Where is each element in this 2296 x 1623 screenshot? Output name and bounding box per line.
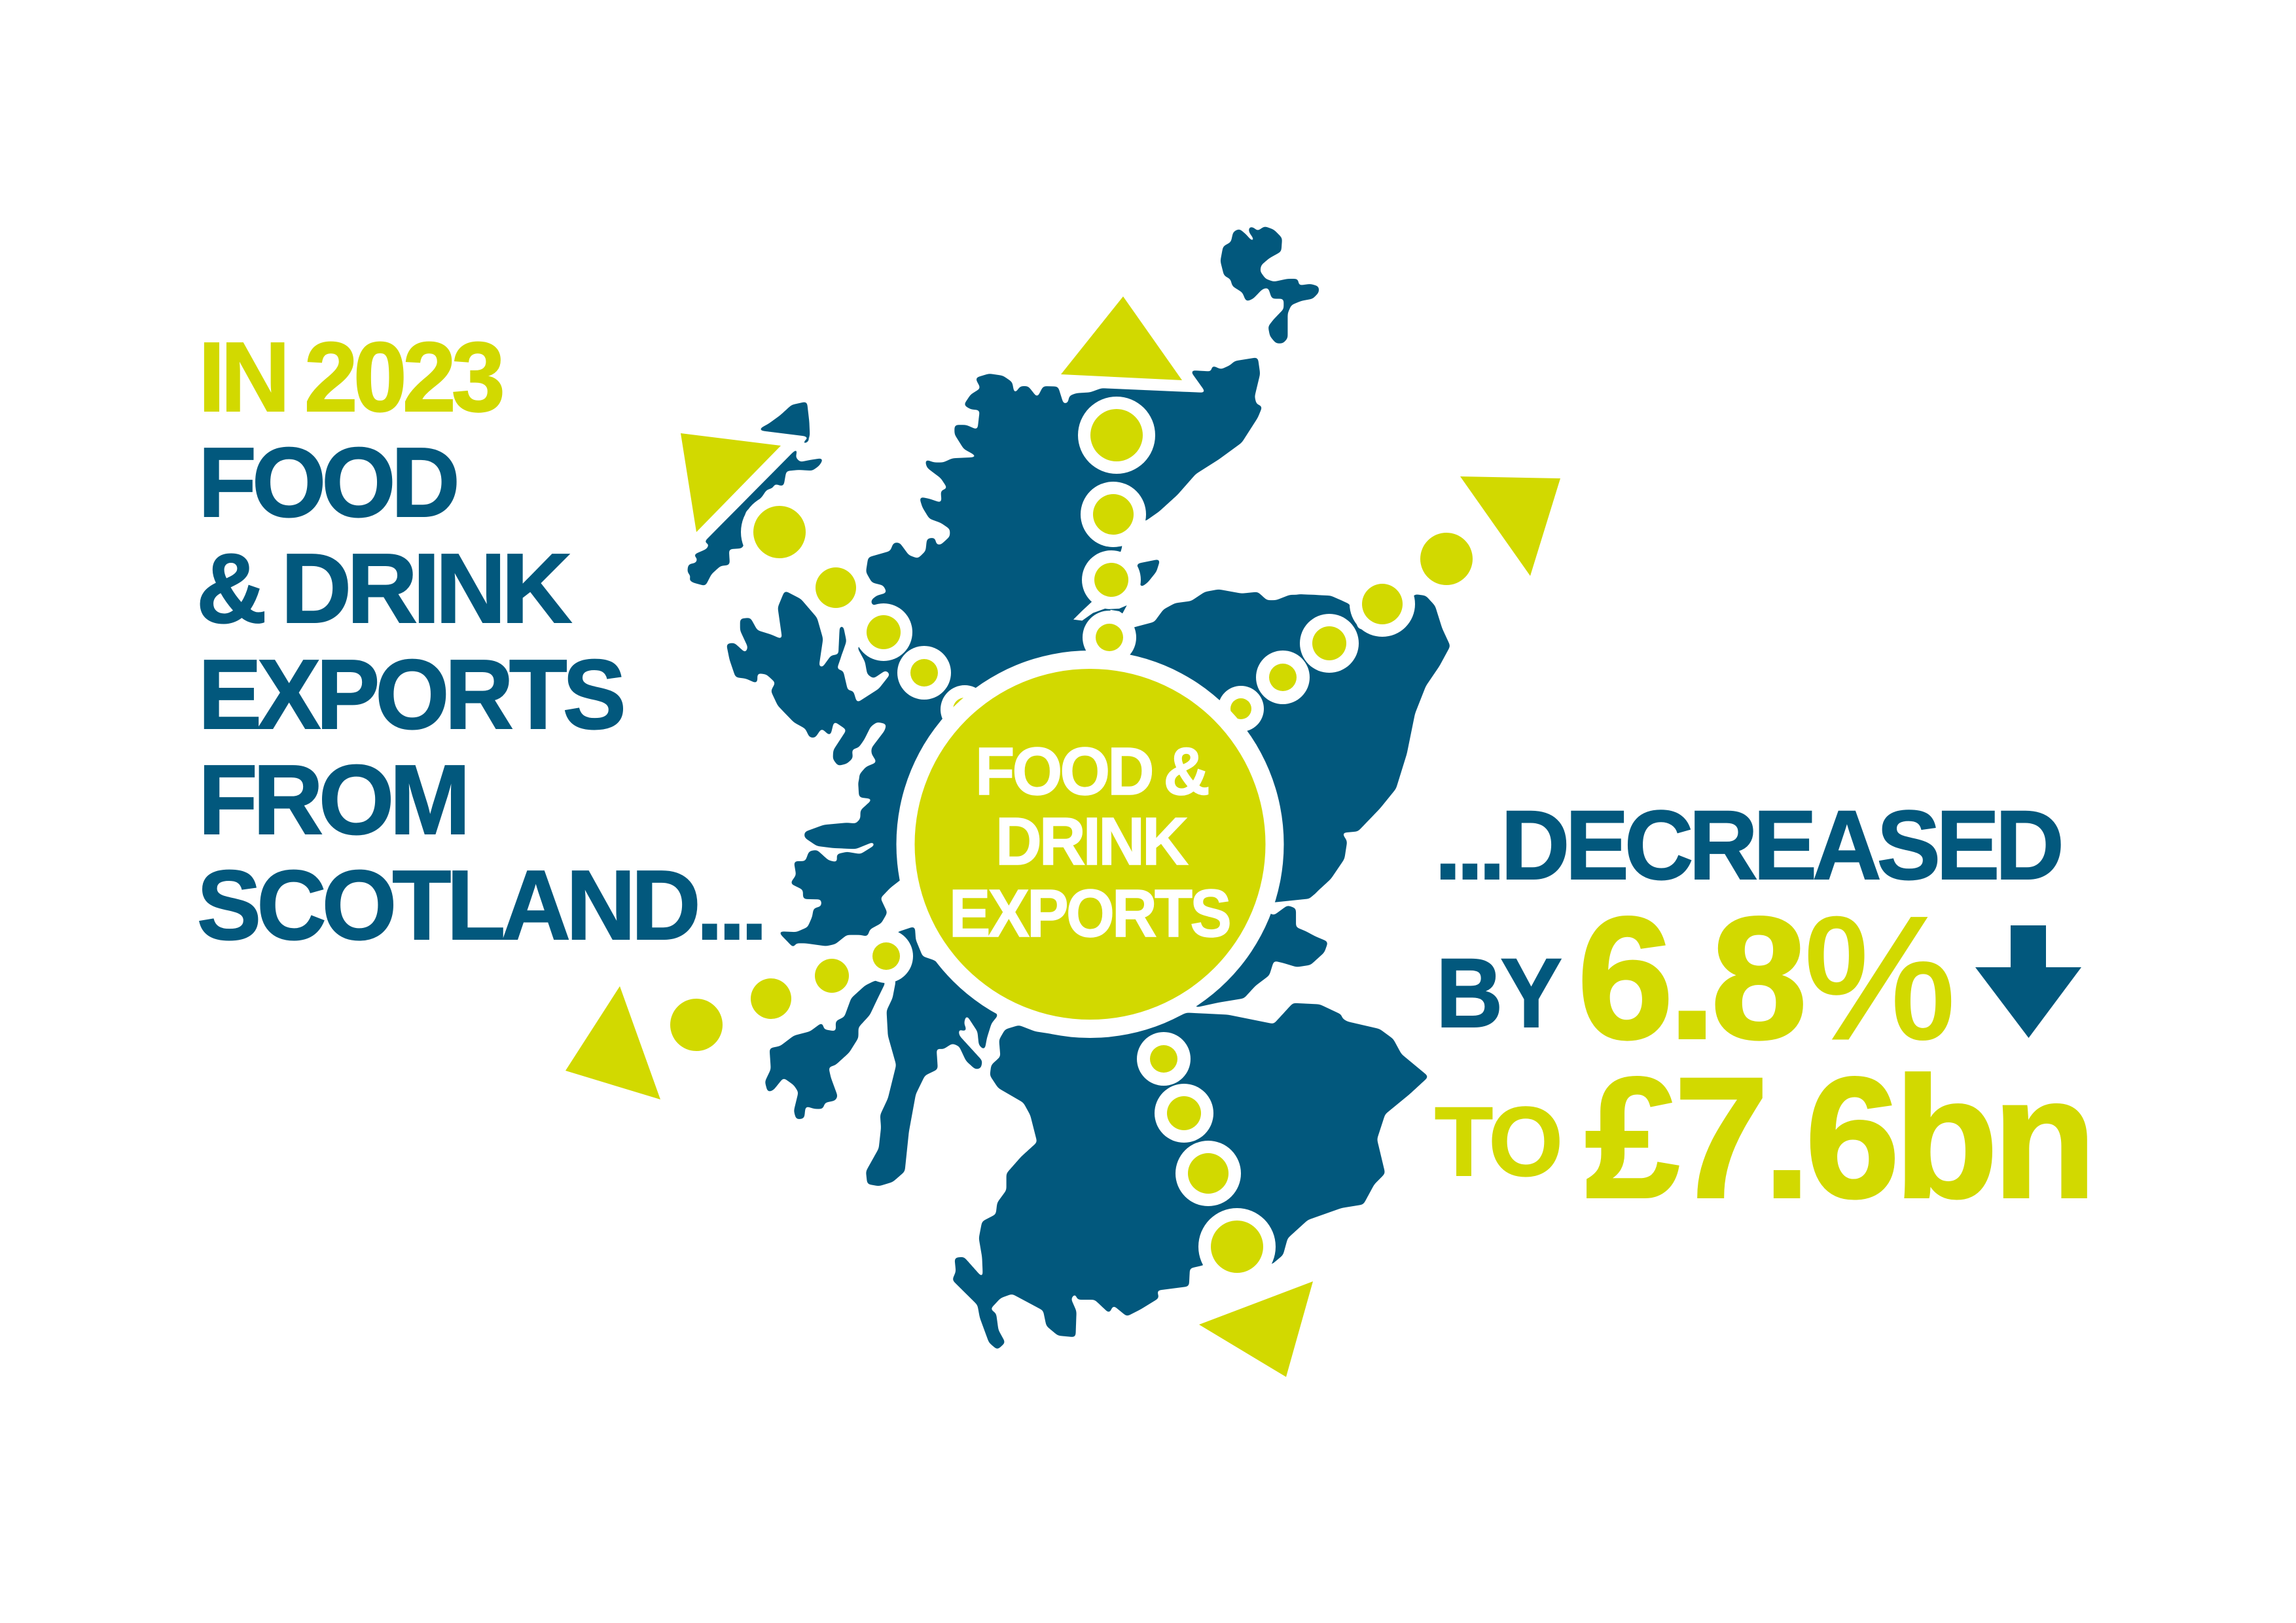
south east ring 3 (1175, 1141, 1241, 1206)
triangle: north east (1460, 476, 1560, 576)
heading text block: FOOD (198, 427, 456, 537)
morvern and mull (778, 781, 943, 948)
left heading (196, 321, 763, 960)
north west dot 1 (741, 493, 818, 571)
north ring 3 (1082, 550, 1141, 609)
land masses (687, 226, 1450, 1349)
map of Scotland (670, 226, 1473, 1349)
north west ring 4 (897, 646, 951, 700)
dot chain: north west (741, 493, 989, 734)
south west dot 4 (670, 999, 723, 1051)
dot chain: south east (1137, 1032, 1276, 1285)
northern island group (1221, 226, 1319, 344)
south east ring 4 (1198, 1208, 1276, 1285)
grampian east coast (1298, 594, 1450, 899)
heading text block: SCOTLAND... (197, 849, 763, 960)
heading year line: IN 2023 (198, 321, 502, 432)
outer hebrides south (687, 438, 824, 586)
east ring 2 (1256, 651, 1310, 704)
north ring 4 (1083, 611, 1136, 664)
outer hebrides north (757, 402, 810, 442)
circle white border (897, 651, 1284, 1038)
north ring 1 (1078, 397, 1155, 474)
figure: 6.8 percent (1577, 882, 1956, 1075)
circle lime fill (915, 669, 1266, 1020)
decreased line: ...DECREASED (1435, 790, 2061, 900)
south east coast (1298, 1004, 1428, 1222)
heading text block (196, 427, 763, 960)
north west ring 3 (855, 603, 912, 661)
triangle: south east (1199, 1281, 1313, 1377)
south west dot 3 (751, 978, 791, 1019)
south west dot 2 (815, 959, 849, 993)
black isle wedge (1137, 559, 1160, 588)
argyll and kintyre (866, 927, 998, 1186)
east ring 4 (1350, 571, 1415, 637)
heading text block: EXPORTS (198, 639, 622, 749)
figure: 6.8 percent: 6.8 (1577, 882, 1803, 1075)
circle label: DRINK (996, 804, 1188, 879)
figure: 7.6 billion pounds: £7.6bn (1585, 1042, 2091, 1234)
by label: BY (1436, 938, 1561, 1048)
circle label: FOOD & (975, 734, 1209, 809)
islay and jura (765, 980, 886, 1119)
north ring 2 (1081, 482, 1146, 547)
triangle: south west (565, 986, 660, 1099)
dot chain: east (1218, 533, 1473, 732)
figure: 6.8 percent: % (1804, 882, 1956, 1075)
fife (1191, 906, 1328, 1007)
central belt (1081, 781, 1342, 902)
icon: down arrow (1975, 925, 2081, 1038)
dot chain: south west (670, 929, 913, 1051)
heading text block: FROM (198, 744, 466, 855)
firth sliver (1107, 605, 1127, 613)
southern scotland (952, 1003, 1342, 1349)
east ring 1 (1218, 686, 1264, 732)
north west dot 2 (816, 567, 856, 608)
south east ring 2 (1155, 1084, 1213, 1143)
heading text block: & DRINK (196, 533, 571, 643)
triangle: top (1061, 296, 1182, 380)
circle label: EXPORTS (949, 876, 1229, 951)
south east ring 1 (1137, 1032, 1191, 1086)
central circle (897, 651, 1284, 1038)
south west ring 1 (859, 929, 913, 983)
firth inlet (1073, 597, 1126, 620)
circle label (949, 734, 1229, 951)
triangle: north west (681, 433, 781, 532)
east ring 3 (1300, 614, 1359, 673)
northern mainland and skye (726, 357, 1342, 823)
north west ring 5 (941, 685, 989, 734)
dot chain: north (1078, 397, 1155, 664)
east dot 5 (1420, 533, 1473, 585)
to label: TO (1435, 1086, 1560, 1196)
